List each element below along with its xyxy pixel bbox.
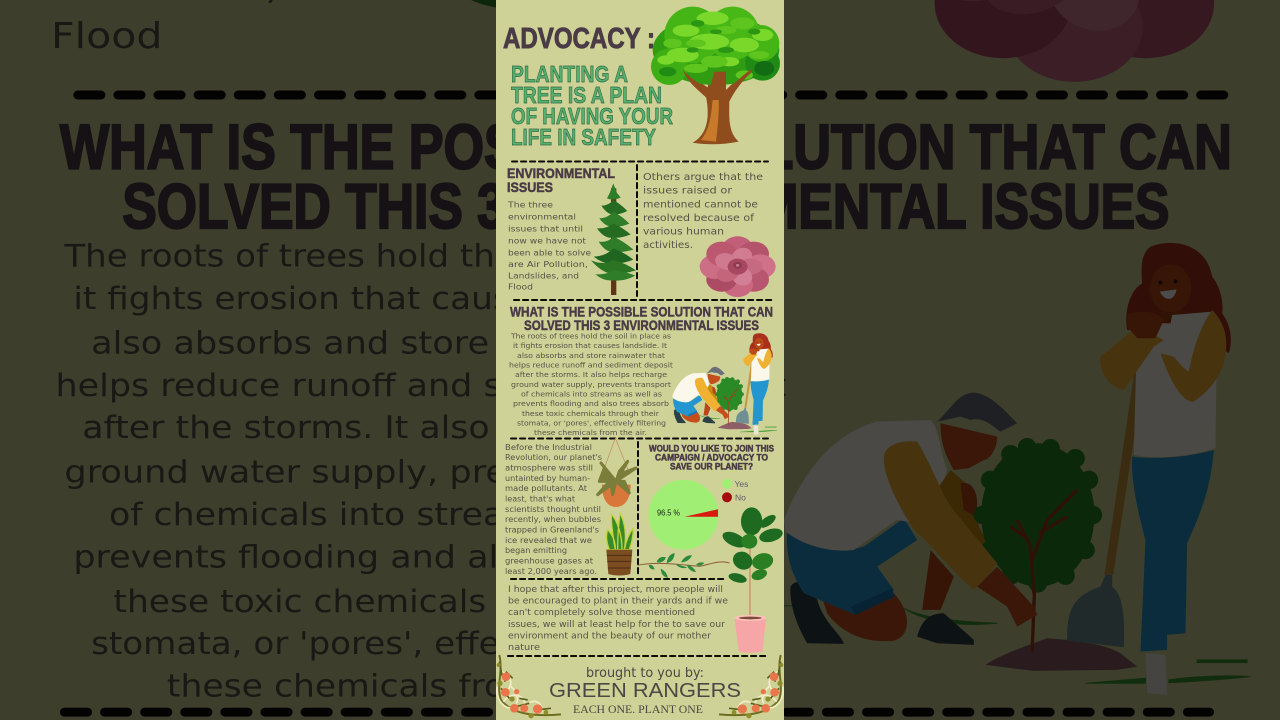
text block: three environmental issues: Flood bbox=[508, 282, 533, 292]
heading: survey question bbox=[649, 444, 774, 472]
heading: possible solution: WHAT IS THE POSSIBLE SOLUTION THAT CAN bbox=[510, 304, 773, 320]
text block: before the industrial revolution: began emitting bbox=[505, 546, 567, 555]
heading: survey question: CAMPAIGN / ADVOCACY TO bbox=[655, 452, 768, 462]
ornament: left floral corner bbox=[497, 655, 561, 718]
text block: roots of trees bbox=[509, 332, 673, 437]
footer: credits bbox=[549, 666, 741, 716]
legend: Yes bbox=[734, 479, 748, 489]
text block: before the industrial revolution: Before the Industrial bbox=[505, 443, 592, 452]
text block: three environmental issues: now we have not bbox=[508, 236, 586, 246]
text block: others argue: mentioned cannot be bbox=[643, 200, 758, 210]
heading: possible solution: SOLVED THIS 3 ENVIRONMENTAL ISSUES bbox=[524, 318, 759, 334]
text block: roots of trees: after the storms. It also helps recharge bbox=[515, 371, 667, 379]
text block: roots of trees: it fights erosion that causes landslide. It bbox=[513, 342, 667, 350]
text block: roots of trees: prevents flooding and also trees absorb bbox=[513, 400, 670, 408]
text block: before the industrial revolution: untainted by human- bbox=[505, 474, 590, 483]
heading: environmental issues: ISSUES bbox=[507, 179, 553, 195]
legend bbox=[722, 479, 748, 502]
text block: closing hope: can't completely solve those mentioned bbox=[508, 608, 695, 618]
heading: advocacy: ADVOCACY : bbox=[503, 23, 655, 55]
legend: No bbox=[735, 492, 746, 502]
text: each one plant one: EACH ONE. PLANT ONE bbox=[573, 702, 703, 716]
text block: three environmental issues bbox=[507, 200, 591, 292]
text block: roots of trees: these toxic chemicals through their bbox=[522, 410, 659, 418]
panel: environmental issues bbox=[507, 165, 776, 297]
icon: leafy vine bbox=[638, 553, 729, 578]
poster: central infographic column bbox=[496, 0, 784, 720]
heading: planting a tree slogan: PLANTING A bbox=[511, 61, 628, 87]
panel: survey bbox=[648, 444, 774, 550]
icon: potted fiddle-leaf plant bbox=[720, 507, 784, 653]
text block: before the industrial revolution: recently, when bubbles bbox=[505, 515, 601, 524]
text block: others argue: Others argue that the bbox=[643, 172, 763, 183]
panel: possible solution bbox=[509, 304, 777, 437]
text block: before the industrial revolution bbox=[505, 443, 602, 576]
pie chart: 96.5 percent yes: 96.5 % bbox=[657, 508, 680, 518]
text block: three environmental issues: The three bbox=[507, 200, 553, 210]
text block: before the industrial revolution: least, that's what bbox=[505, 494, 575, 504]
text block: three environmental issues: are Air Pollution, bbox=[508, 260, 588, 269]
text block: closing hope: issues, we will at least help for the to save our bbox=[508, 620, 726, 630]
text block: closing hope: environment and the beauty of our mother bbox=[508, 632, 712, 642]
text block: before the industrial revolution: made pollutants. At bbox=[505, 484, 587, 493]
text block: before the industrial revolution: trapped in Greenland's bbox=[505, 526, 599, 534]
heading: environmental issues bbox=[507, 165, 615, 195]
text block: roots of trees: helps reduce runoff and sediment deposit bbox=[509, 362, 673, 370]
text block: roots of trees: stomata, or 'pores', effectively filtering bbox=[517, 420, 666, 428]
icon: two people planting a tree bbox=[672, 333, 777, 435]
heading: planting a tree slogan: TREE IS A PLAN bbox=[511, 82, 662, 108]
text block: closing hope bbox=[508, 585, 728, 653]
text block: three environmental issues: environmental bbox=[508, 212, 576, 222]
heading: planting a tree slogan bbox=[511, 61, 673, 150]
text: green rangers: GREEN RANGERS bbox=[549, 680, 741, 702]
text block: closing hope: I hope that after this project, more people will bbox=[508, 585, 723, 595]
icon: pine tree bbox=[591, 183, 636, 295]
text block: three environmental issues: Landslides, and bbox=[508, 272, 579, 280]
text block: others argue: activities. bbox=[643, 240, 693, 251]
text block: roots of trees: also absorbs and store rainwater that bbox=[517, 352, 665, 360]
text block: roots of trees: of chemicals into streams as well as bbox=[521, 390, 662, 398]
text block: before the industrial revolution: Revolution, our planet's bbox=[505, 453, 602, 462]
text block: others argue: resolved because of bbox=[643, 213, 755, 224]
icon: hanging plant bbox=[598, 438, 636, 507]
text block: closing hope: nature bbox=[508, 643, 540, 653]
text block: before the industrial revolution: scientists thought until bbox=[505, 505, 601, 514]
heading: planting a tree slogan: LIFE IN SAFETY bbox=[511, 124, 656, 150]
text: brought to you by: brought to you by: bbox=[586, 666, 704, 681]
heading: environmental issues: ENVIRONMENTAL bbox=[507, 165, 615, 181]
text block: before the industrial revolution: atmosphere was still bbox=[505, 464, 593, 472]
icon: large green tree bbox=[651, 7, 780, 144]
icon: pink peony bbox=[700, 236, 776, 297]
text block: before the industrial revolution: ice revealed that we bbox=[505, 536, 592, 545]
ornament: right floral corner bbox=[719, 655, 783, 718]
heading: possible solution bbox=[510, 304, 773, 334]
heading: survey question: WOULD YOU LIKE TO JOIN THIS bbox=[649, 444, 774, 454]
text block: three environmental issues: issues that until bbox=[508, 224, 583, 234]
text block: others argue: issues raised or bbox=[643, 186, 733, 196]
text block: before the industrial revolution: least 2,000 years ago. bbox=[505, 567, 597, 576]
text block: roots of trees: ground water supply, prevents transport bbox=[511, 381, 671, 389]
heading: planting a tree slogan: OF HAVING YOUR bbox=[511, 103, 673, 129]
text block: roots of trees: these chemicals from the air. bbox=[534, 429, 647, 437]
text block: before the industrial revolution: greenhouse gases at bbox=[505, 556, 593, 566]
heading: survey question: SAVE OUR PLANET? bbox=[670, 462, 753, 472]
text block: three environmental issues: been able to solve bbox=[508, 248, 591, 258]
text block: roots of trees: The roots of trees hold the soil in place as bbox=[510, 332, 671, 340]
text block: closing hope: be encouraged to plant in their yards and if we bbox=[508, 596, 728, 606]
text block: others argue: various human bbox=[643, 226, 724, 238]
text block: others argue bbox=[643, 172, 763, 251]
icon: snake plant bbox=[606, 513, 633, 575]
